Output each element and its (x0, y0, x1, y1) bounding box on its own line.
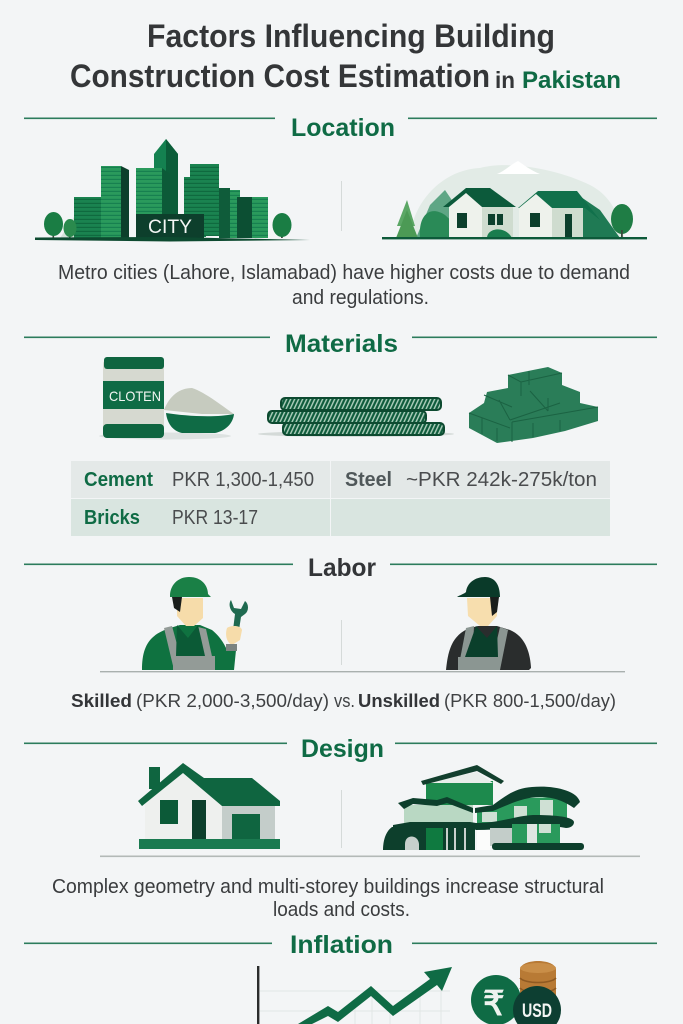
label: CLOTEN: CLOTEN (109, 388, 161, 404)
text: labor rates: vs. (334, 691, 355, 711)
chart: rising inflation line (257, 966, 452, 1024)
house: right (518, 191, 600, 238)
label: USD: USD (522, 1001, 552, 1022)
house: left (443, 188, 516, 238)
icon: unskilled worker (446, 577, 531, 670)
table: material prices (71, 461, 610, 536)
text: location note (58, 262, 630, 309)
text: design note: Complex geometry and multi-storey buildings increase structural (52, 876, 604, 898)
row: bricks: Bricks (84, 507, 140, 529)
text: labor rates: Skilled (71, 691, 132, 711)
heading: Design: Design (301, 735, 384, 763)
text: design note (52, 876, 604, 921)
wrench (230, 600, 248, 630)
row: cement: Cement (84, 469, 153, 491)
text: location note: and regulations. (292, 287, 429, 309)
icon: coins and currency (471, 961, 561, 1024)
text: labor rates: (PKR 2,000-3,500/day) (136, 691, 329, 711)
icon: suburban houses (382, 161, 647, 239)
heading: Inflation: Inflation (290, 931, 393, 959)
heading: Location: Location (291, 114, 395, 142)
row: cement (84, 469, 314, 491)
icon: simple house (138, 763, 280, 849)
row: steel: ~PKR 242k-275k/ton (406, 469, 597, 491)
row: bricks: PKR 13-17 (172, 507, 258, 529)
ground line: design (100, 856, 640, 857)
text: labor rates: Unskilled (358, 691, 440, 711)
icon: cement bucket and pile (99, 357, 234, 440)
title: in (495, 67, 515, 93)
title: Construction Cost Estimation (70, 58, 490, 94)
heading: Labor: Labor (308, 554, 376, 582)
text: design note: loads and costs. (273, 899, 410, 921)
ground line: labor (100, 671, 625, 672)
heading: Materials: Materials (285, 330, 398, 358)
row: bricks (84, 507, 258, 529)
divider: location (341, 181, 342, 231)
icon: steel rebars (258, 398, 454, 437)
icon: city skyline (35, 139, 310, 242)
tree: right (272, 213, 292, 238)
text: labor rates: (PKR 800-1,500/day) (444, 691, 616, 711)
trees: left (44, 212, 76, 238)
icon: modern multi-storey building (383, 765, 584, 850)
row: cement: PKR 1,300-1,450 (172, 469, 314, 491)
title: Factors Influencing Building (147, 18, 555, 54)
divider: labor (341, 620, 342, 665)
icon: skilled worker (142, 577, 248, 670)
text: location note: Metro cities (Lahore, Islamabad) have higher costs due to demand (58, 262, 630, 284)
divider: design (341, 790, 342, 848)
icon: brick stack (469, 367, 598, 443)
rupee symbol: ₹ (483, 985, 505, 1023)
row: steel: Steel (345, 469, 392, 491)
title: Pakistan (522, 67, 621, 94)
sign: CITY: CITY (148, 217, 192, 238)
title (70, 18, 621, 94)
text: labor rates (71, 691, 616, 711)
